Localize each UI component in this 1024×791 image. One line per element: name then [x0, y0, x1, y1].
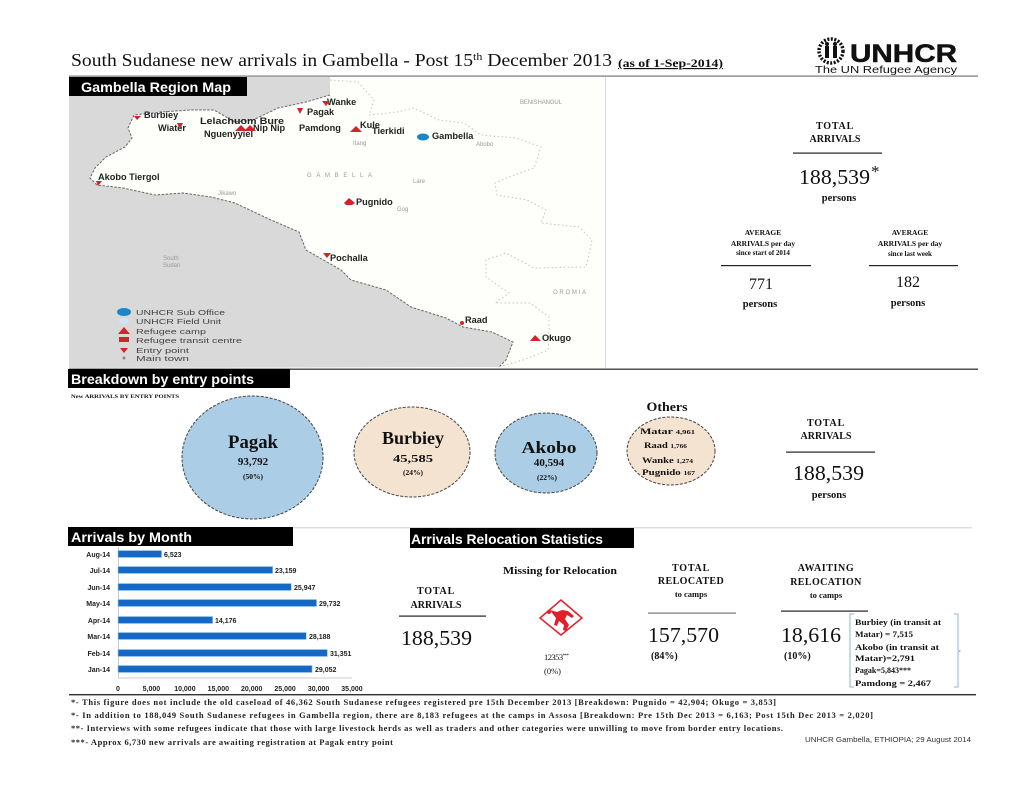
bar chart: 25,000	[274, 686, 296, 693]
bar chart: 20,000	[241, 686, 263, 693]
missing for relocation: 12353	[544, 652, 563, 662]
awaiting relocation breakdown: Burbiey (in transit at	[855, 617, 941, 627]
map: place labels: Pamdong	[299, 123, 341, 133]
awaiting relocation: to camps	[810, 590, 843, 600]
panel: average arrivals since start of 2014: persons	[743, 299, 777, 310]
title: South Sudanese new arrivals in Gambella - Post 15	[71, 50, 440, 70]
bar chart: 14,176	[215, 618, 237, 625]
total arrivals: ARRIVALS	[411, 600, 462, 611]
heading: Arrivals by Month	[71, 529, 192, 545]
map: place labels: Pochalla	[330, 253, 369, 263]
panel: average arrivals since last week: persons	[891, 298, 925, 309]
map: place labels: Pugnido	[356, 197, 393, 207]
bubble: Burbiey: Burbiey	[382, 428, 444, 448]
panel: average arrivals since last week: 182	[896, 274, 920, 291]
panel: average arrivals since start of 2014: since start of 2014	[736, 249, 790, 257]
bar chart: 28,188	[309, 634, 331, 641]
bar chart: Feb-14	[87, 651, 110, 658]
map: heading: Gambella Region Map	[81, 79, 231, 95]
map: heading	[69, 77, 247, 96]
bubble: Pagak: (50%)	[243, 472, 263, 481]
bubble: Akobo	[495, 413, 597, 493]
source credit: UNHCR Gambella, ETHIOPIA; 29 August 2014	[805, 737, 971, 744]
awaiting relocation breakdown: Akobo (in transit at	[855, 642, 939, 652]
icon: falling person warning	[540, 600, 582, 635]
map: place labels: Lare	[413, 179, 426, 185]
bar chart: 29,052	[315, 667, 337, 674]
awaiting relocation: 18,616	[781, 623, 841, 647]
bubble: Burbiey: (24%)	[403, 468, 423, 477]
title: December 2013	[482, 50, 612, 70]
map: neighbouring territory	[69, 77, 513, 368]
panel: breakdown by entry points	[68, 369, 875, 519]
bar chart: Apr-14	[88, 618, 110, 625]
bubble: Others: Wanke 1,274	[642, 455, 693, 465]
footnotes	[71, 697, 873, 747]
heading	[68, 369, 290, 388]
map: place labels: Gog	[397, 207, 408, 213]
map: place labels: Itang	[353, 141, 366, 147]
panel: average arrivals since last week: ARRIVALS per day	[878, 239, 942, 248]
footnotes: *- This figure does not include the old caseload of 46,362 South Sudanese refugees registered pre 15th December 2013 [Breakdown: Pugnido = 42,904; Okugo = 3,853]	[71, 697, 776, 707]
total arrivals: 188,539	[793, 461, 864, 485]
bubble: Akobo: (22%)	[537, 473, 557, 482]
map: legend: UNHCR Sub Office	[136, 308, 225, 317]
map: legend: UNHCR Field Unit	[136, 317, 222, 326]
bubble: Others: Raad 1,766	[644, 440, 687, 450]
bubble: Akobo: Akobo	[522, 438, 576, 457]
bar chart: May-14	[86, 601, 110, 608]
map: place labels: Gambella	[432, 131, 474, 141]
total arrivals: 188,539	[401, 626, 472, 650]
awaiting relocation: AWAITING	[798, 563, 854, 574]
subheading: New ARRIVALS BY ENTRY POINTS	[71, 394, 179, 400]
bubble: Burbiey	[354, 407, 470, 497]
total relocated	[648, 563, 736, 662]
missing for relocation	[503, 566, 618, 676]
bubble: Akobo: 40,594	[534, 457, 565, 469]
panel: total arrivals: ARRIVALS	[810, 134, 861, 145]
heading	[410, 528, 634, 548]
footnotes: ***- Approx 6,730 new arrivals are awaiting registration at Pagak entry point	[71, 737, 393, 747]
bar chart: 30,000	[308, 686, 329, 693]
map: legend: Refugee transit centre	[136, 336, 242, 345]
bar chart: Jul-14	[90, 568, 110, 575]
logo: UNHCR	[815, 39, 958, 76]
panel: total arrivals	[793, 121, 882, 204]
map: place labels: Nguenyyiel	[204, 129, 253, 139]
bar chart: Mar-14	[87, 634, 110, 641]
bar chart: 25,947	[294, 585, 316, 592]
awaiting relocation breakdown: Matar) = 7,515	[855, 629, 913, 639]
bar chart: 35,000	[341, 686, 363, 693]
panel: average arrivals since last week: since last week	[888, 250, 932, 258]
bubble: Others	[627, 399, 715, 485]
map: western border	[90, 95, 513, 367]
awaiting relocation: RELOCATION	[790, 577, 862, 588]
heading	[68, 527, 293, 546]
map: place labels: Pagak	[307, 107, 335, 117]
map: place labels: Abobo	[476, 142, 494, 148]
total arrivals	[786, 418, 875, 501]
map: place labels: Akobo Tiergol	[98, 172, 160, 182]
panel: average arrivals since start of 2014	[721, 228, 811, 310]
bar chart: Aug-14	[86, 552, 110, 559]
bar chart: 10,000	[174, 686, 196, 693]
panel: average arrivals since start of 2014: ARRIVALS per day	[731, 239, 795, 248]
bar chart: 6,523	[164, 552, 182, 559]
bar chart: 5,000	[143, 686, 160, 693]
bubble: Others: Others	[646, 399, 688, 414]
total relocated: to camps	[675, 589, 708, 599]
total arrivals: TOTAL	[417, 586, 455, 597]
title	[71, 50, 723, 70]
map: legend: Entry point	[136, 346, 190, 355]
awaiting relocation breakdown	[850, 614, 960, 688]
panel: arrivals relocation statistics	[399, 528, 960, 688]
divider lines	[69, 76, 978, 695]
panel: average arrivals since start of 2014: AVERAGE	[745, 228, 781, 237]
map: legend: Refugee camp	[136, 327, 206, 336]
map: place labels: OROMIA	[553, 290, 586, 296]
map: place labels: GAMBELLA	[307, 173, 372, 179]
missing for relocation: (0%)	[544, 666, 561, 676]
footnotes: **- Interviews with some refugees indicate that those with large livestock herds as well as traders and other categories were unwilling to move from border entry locations.	[71, 723, 783, 733]
awaiting relocation breakdown: Pamdong = 2,467	[855, 678, 932, 688]
map: place labels: Wiater	[158, 123, 186, 133]
logo: UNHCR: The UN Refugee Agency	[815, 64, 958, 76]
bar chart: 0	[116, 686, 120, 693]
total relocated: 157,570	[648, 623, 719, 647]
awaiting relocation	[781, 563, 868, 662]
total arrivals	[399, 586, 486, 650]
panel: total arrivals: 188,539	[799, 165, 870, 189]
panel: Gambella region map	[69, 77, 605, 368]
bar chart: 29,732	[319, 601, 341, 608]
map: place labels: Lelachuom Bure	[200, 116, 284, 126]
footnotes: *- In addition to 188,049 South Sudanese refugees in Gambella region, there are 8,183 refugees at the camps in Assosa [Breakdown: Pre 15th Dec 2013 = 6,163; Post 15th Dec 2013 = 2,020]	[71, 710, 873, 720]
map: place labels: Okugo	[542, 333, 571, 343]
total relocated: (84%)	[651, 651, 678, 662]
awaiting relocation breakdown: Matar)=2,791	[855, 653, 915, 663]
panel: average arrivals since last week	[869, 228, 958, 309]
total relocated: TOTAL	[672, 563, 710, 574]
bubble: Pagak	[182, 396, 323, 519]
missing for relocation: Missing for Relocation	[503, 566, 618, 577]
map: place labels: Raad	[465, 315, 487, 325]
map: legend: Main town	[136, 354, 189, 363]
map: place labels: Nip Nip	[253, 123, 286, 133]
panel: arrivals by month	[68, 527, 363, 693]
panel: average arrivals since last week: AVERAGE	[892, 228, 928, 237]
map: place labels: Kule	[360, 120, 380, 130]
total arrivals: ARRIVALS	[801, 431, 852, 442]
map: place labels: BENISHANGUL	[520, 100, 563, 106]
map: place labels: South	[163, 256, 179, 262]
map: place labels: Tierkidi	[372, 126, 405, 136]
bar chart: 23,159	[275, 568, 297, 575]
bubble: Others: Pugnido 167	[642, 467, 695, 477]
bubble: Pagak: Pagak	[228, 432, 278, 453]
map: legend	[117, 308, 242, 363]
map: place labels: Wanke	[327, 97, 356, 107]
panel: total arrivals: persons	[822, 193, 856, 204]
map: place labels: Jikawo	[218, 191, 237, 197]
bar chart	[86, 547, 363, 693]
map: markers	[96, 101, 541, 341]
bar chart: Jan-14	[88, 667, 110, 674]
total arrivals: TOTAL	[807, 418, 845, 429]
heading: Arrivals Relocation Statistics	[411, 531, 603, 547]
total arrivals: persons	[812, 490, 846, 501]
map: place labels: Sudan	[163, 263, 180, 269]
awaiting relocation breakdown: Pagak=5,843***	[855, 665, 911, 675]
title: th	[473, 51, 483, 63]
panel: total arrivals: TOTAL	[816, 121, 854, 132]
awaiting relocation: (10%)	[784, 651, 811, 662]
map: eastern border	[330, 80, 592, 367]
bubble: Others: Matar 4,961	[640, 426, 695, 436]
heading: Breakdown by entry points	[71, 371, 254, 387]
bar chart: Jun-14	[87, 585, 110, 592]
bar chart: 15,000	[208, 686, 229, 693]
map: place labels	[98, 97, 586, 343]
panel: average arrivals since start of 2014: 771	[749, 276, 773, 293]
total relocated: RELOCATED	[658, 576, 724, 587]
bubble: Burbiey: 45,585	[393, 453, 434, 465]
panel: total arrivals: *	[871, 162, 880, 181]
bar chart: 31,351	[330, 651, 352, 658]
title: (as of 1-Sep-2014)	[618, 58, 723, 70]
map: place labels: Burbiey	[144, 110, 179, 120]
bubble: Pagak: 93,792	[238, 456, 269, 468]
logo: UNHCR: UNHCR	[850, 40, 957, 68]
missing for relocation: ***	[563, 654, 570, 659]
